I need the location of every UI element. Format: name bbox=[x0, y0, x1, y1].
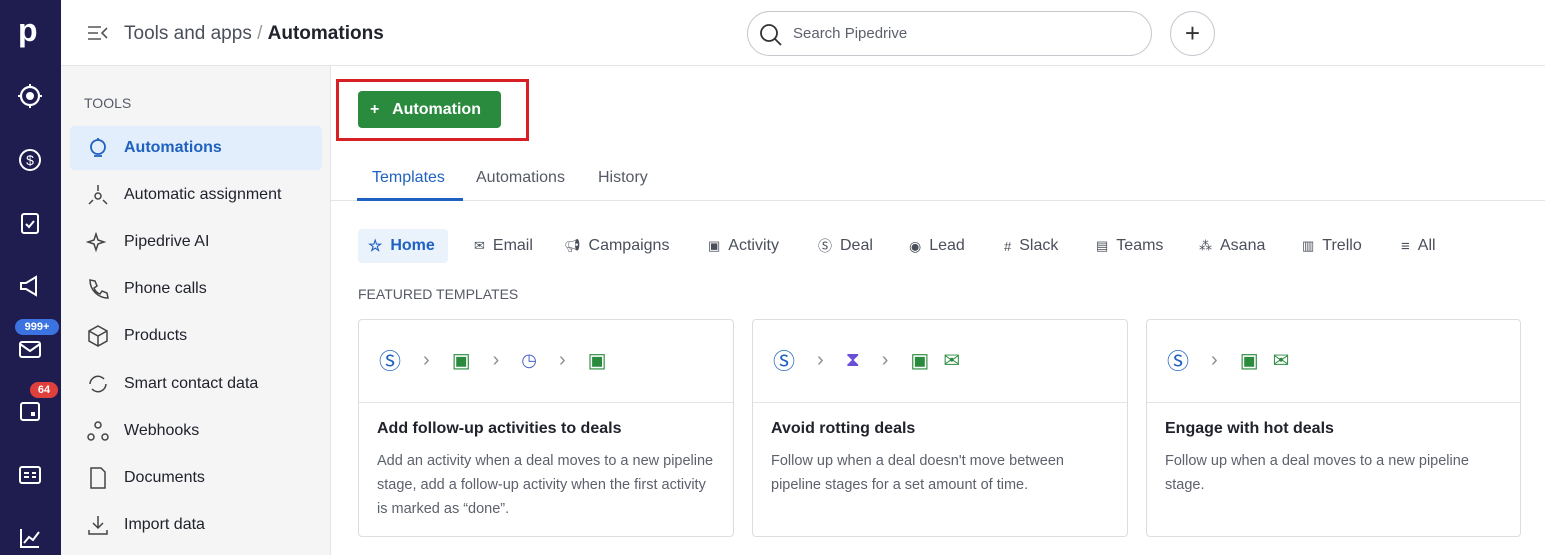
category chips: 📢︎ bbox=[564, 238, 581, 253]
header bar bbox=[61, 0, 1545, 66]
category chips: ▤ bbox=[1096, 238, 1108, 253]
icon: clipboard bbox=[21, 213, 39, 234]
tools sidebar: Documents bbox=[124, 469, 205, 486]
card 3: ✉ bbox=[1273, 350, 1289, 372]
icon: calendar bbox=[20, 402, 40, 421]
badge 64: 64 bbox=[38, 384, 50, 396]
icon: mail bbox=[19, 341, 41, 358]
badge 999+: 999+ bbox=[25, 321, 49, 333]
card 1: › bbox=[493, 348, 499, 370]
left navigation rail bbox=[0, 0, 61, 555]
icon: menu bbox=[88, 26, 108, 40]
category chips: ◉ bbox=[909, 238, 921, 254]
tools sidebar: Automatic assignment bbox=[124, 186, 281, 203]
tools sidebar: Pipedrive AI bbox=[124, 233, 209, 250]
category chips: Asana bbox=[1220, 237, 1265, 254]
icon: dollar bbox=[19, 149, 41, 171]
card 2 bbox=[752, 319, 1128, 537]
badge 64 bbox=[30, 382, 58, 398]
card 1: › bbox=[559, 348, 566, 370]
category chips: Activity bbox=[728, 237, 779, 254]
category chips: ≡ bbox=[1401, 238, 1410, 254]
card 3: › bbox=[1211, 348, 1218, 370]
icon: contacts bbox=[19, 466, 41, 484]
category chips: ⁂ bbox=[1199, 238, 1212, 253]
icon: chart bbox=[20, 529, 40, 548]
add button bbox=[1170, 11, 1215, 56]
badge 999+ bbox=[15, 319, 59, 335]
item: Automations active bbox=[70, 126, 322, 170]
icon: pipedrive logo: p bbox=[18, 12, 38, 48]
card 1: ▣ bbox=[452, 350, 471, 372]
category chips: Ⓢ bbox=[818, 238, 832, 254]
card 1 bbox=[358, 319, 734, 537]
card 2: › bbox=[817, 348, 824, 370]
category chips: # bbox=[1004, 238, 1011, 254]
category chips: Home bbox=[390, 237, 435, 254]
card 3: ▣ bbox=[1240, 350, 1259, 372]
tools sidebar: Smart contact data bbox=[124, 375, 258, 392]
category chips: Lead bbox=[929, 237, 965, 254]
card 3: Engage with hot deals bbox=[1165, 420, 1334, 437]
add button: + bbox=[1185, 18, 1200, 48]
card 2: › bbox=[882, 348, 888, 370]
icon: dollar: $ bbox=[26, 152, 34, 168]
item: Automations active: Automations bbox=[124, 139, 222, 156]
tools sidebar: Products bbox=[124, 327, 187, 344]
card 1: Add an activity when a deal moves to a new pipeline stage, add a follow-up activity when the first activity is marked as “done”. bbox=[377, 453, 713, 517]
tabs: Automations bbox=[476, 169, 565, 186]
card 1: ▣ bbox=[588, 350, 607, 372]
card 3: Follow up when a deal moves to a new pipeline stage. bbox=[1165, 453, 1469, 493]
category chips: ▣ bbox=[708, 238, 720, 253]
icon: megaphone bbox=[20, 275, 37, 297]
card 2: ▣ bbox=[910, 350, 929, 372]
card 2: Follow up when a deal doesn't move between pipeline stages for a set amount of time. bbox=[771, 453, 1064, 493]
button: + Automation bbox=[358, 91, 501, 128]
tools sidebar: Webhooks bbox=[124, 422, 199, 439]
category chips: ☆ bbox=[368, 238, 382, 255]
search box bbox=[747, 11, 1152, 56]
category chips: ✉ bbox=[474, 238, 485, 253]
category chips: Trello bbox=[1322, 237, 1362, 254]
card 2: Ⓢ bbox=[773, 349, 795, 374]
card 3 bbox=[1146, 319, 1521, 537]
search box: Search Pipedrive bbox=[793, 25, 907, 42]
category chips: Campaigns bbox=[589, 237, 669, 254]
category chips bbox=[358, 229, 1436, 263]
heading: featured templates: FEATURED TEMPLATES bbox=[358, 286, 518, 302]
tabs: History bbox=[598, 169, 648, 186]
card 1: Add follow-up activities to deals bbox=[377, 420, 621, 437]
category chips: Deal bbox=[840, 237, 873, 254]
card 1: › bbox=[423, 348, 430, 370]
icon: target bbox=[18, 84, 42, 108]
breadcrumb: Tools and apps / Automations bbox=[124, 23, 384, 44]
heading: TOOLS: TOOLS bbox=[84, 95, 131, 111]
tools sidebar: Import data bbox=[124, 516, 205, 533]
card 1: Ⓢ bbox=[379, 349, 401, 374]
category chips: Slack bbox=[1019, 237, 1058, 254]
tabs: Templates bbox=[372, 169, 445, 186]
tabs bbox=[331, 160, 1545, 201]
tools sidebar bbox=[61, 66, 331, 555]
card 2: ✉ bbox=[943, 350, 960, 372]
callout: red highlight box bbox=[336, 79, 529, 141]
card 3: Ⓢ bbox=[1167, 349, 1189, 374]
button: + Automation: + Automation bbox=[370, 101, 481, 118]
card 2: Avoid rotting deals bbox=[771, 420, 915, 437]
card 2: ⧗ bbox=[846, 348, 860, 370]
category chips: Email bbox=[493, 237, 533, 254]
tools sidebar: Phone calls bbox=[124, 280, 207, 297]
category chips: All bbox=[1418, 237, 1436, 254]
category chips: ▥ bbox=[1302, 238, 1314, 253]
card 1: ◷ bbox=[521, 350, 537, 370]
category chips: Teams bbox=[1116, 237, 1163, 254]
